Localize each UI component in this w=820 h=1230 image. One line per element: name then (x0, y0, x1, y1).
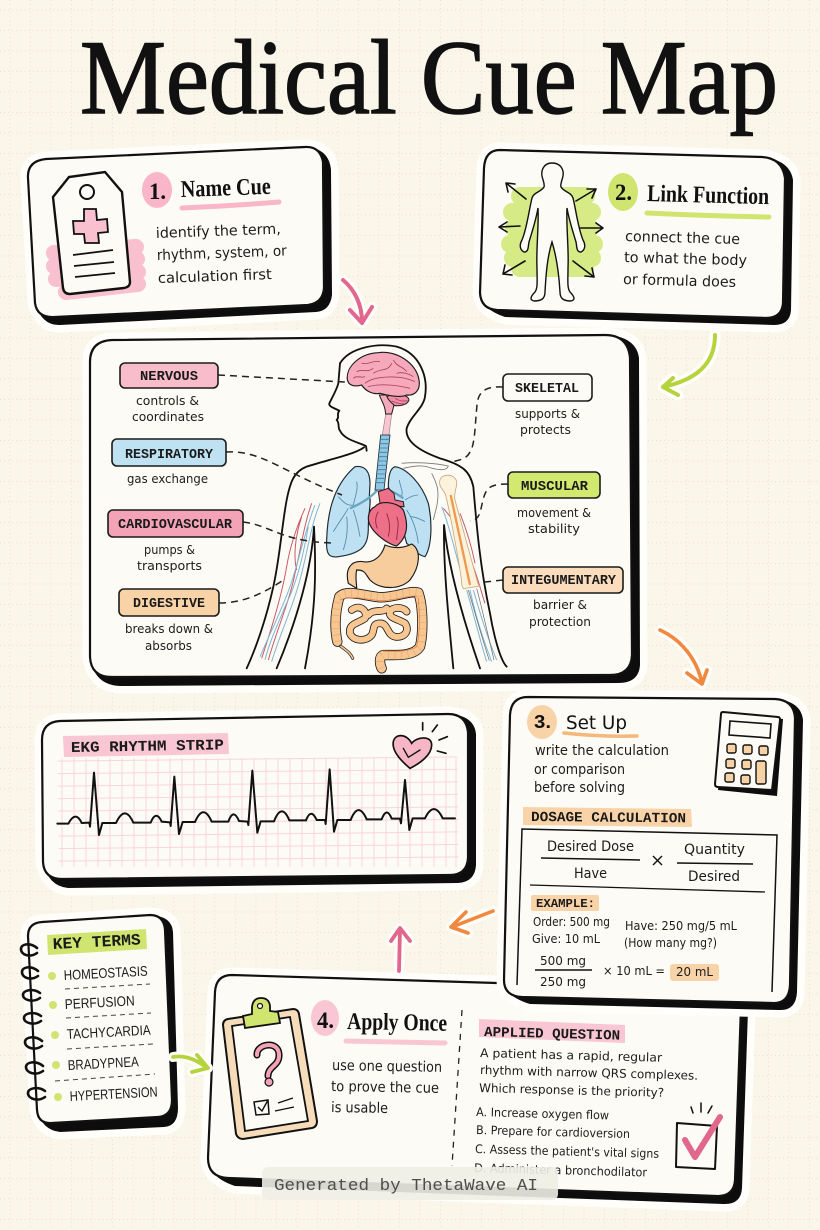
term list (48, 963, 158, 1104)
example values (532, 915, 737, 950)
answer options: A. Increase oxygen flow (476, 1105, 609, 1122)
label: digestive: DIGESTIVE (133, 597, 205, 612)
label: cardiovascular: pumps & (144, 543, 195, 557)
heading: apply once (346, 1009, 448, 1043)
panel: 3 set up (504, 697, 803, 1010)
text block (331, 1058, 442, 1117)
body outline (247, 345, 507, 668)
heading: name cue: Name Cue (180, 174, 271, 203)
trachea (375, 414, 392, 490)
label: skeletal: protects (520, 423, 571, 437)
step number 1: 1. (149, 179, 166, 204)
example calculation: 20 mL (676, 965, 713, 979)
watermark (262, 1167, 558, 1200)
label: integumentary: INTEGUMENTARY (511, 574, 617, 589)
term list: HYPERTENSION (69, 1083, 158, 1104)
step number 3 (527, 705, 557, 739)
label: muscular: MUSCULAR (521, 480, 589, 495)
label: respiratory: RESPIRATORY (125, 448, 214, 463)
stomach (347, 544, 418, 588)
label: respiratory: gas exchange (127, 472, 208, 486)
term list: PERFUSION (64, 992, 135, 1012)
example calculation (535, 954, 719, 989)
text block: before solving (534, 780, 625, 796)
label: skeletal: supports & (515, 407, 580, 421)
text block: write the calculation (535, 743, 669, 759)
text block: to what the body (624, 250, 748, 269)
formula: Quantity (684, 842, 745, 858)
question text (479, 1046, 698, 1100)
label: digestive (119, 589, 219, 653)
icon: calculator (715, 712, 783, 796)
label: key terms: KEY TERMS (52, 931, 142, 954)
heading: apply once: Apply Once (347, 1009, 448, 1037)
answer options: D. Administer a bronchodilator (474, 1161, 647, 1180)
text block: identify the term, (156, 222, 281, 242)
text block (623, 229, 748, 291)
icon: medical tag (53, 172, 138, 294)
formula: Desired (688, 869, 740, 885)
question text: Which response is the priority? (479, 1081, 664, 1100)
label: digestive: breaks down & (125, 622, 213, 636)
answer options: C. Assess the patient's vital signs (475, 1142, 659, 1161)
panel: key terms (21, 915, 178, 1132)
text block: or formula does (623, 272, 736, 291)
label: dosage calculation: DOSAGE CALCULATION (531, 810, 686, 827)
watermark: Generated by ThetaWave AI (274, 1176, 538, 1195)
anatomy illustration (247, 345, 507, 668)
icon: heart (393, 723, 447, 768)
formula box (517, 829, 777, 992)
text block: connect the cue (625, 229, 740, 248)
label: respiratory (112, 439, 226, 486)
text block: calculation first (158, 267, 272, 287)
formula: Have (574, 866, 607, 882)
step number 4: 4. (317, 1008, 334, 1033)
heading: link function: Link Function (647, 181, 769, 210)
label: muscular: movement & (517, 506, 591, 520)
label: cardiovascular (108, 510, 243, 573)
label: example: EXAMPLE: (536, 897, 595, 911)
label: digestive: absorbs (145, 639, 192, 653)
arrow: lime curve (663, 335, 715, 395)
label: applied question: APPLIED QUESTION (484, 1025, 620, 1045)
panel: 1 name cue (28, 147, 332, 325)
leader lines (218, 375, 508, 603)
heading: set up: Set Up (566, 712, 627, 734)
label: ekg rhythm strip: EKG RHYTHM STRIP (71, 737, 224, 757)
text block (534, 743, 669, 796)
label: nervous (120, 363, 218, 424)
term list: TACHYCARDIA (66, 1022, 152, 1042)
label: nervous: coordinates (132, 410, 204, 424)
question text: A patient has a rapid, regular (480, 1046, 662, 1065)
step number 1 (142, 172, 172, 208)
text block: rhythm, system, or (157, 243, 287, 264)
step number 3: 3. (534, 712, 551, 732)
term list: BRADYPNEA (67, 1053, 140, 1073)
lungs (327, 466, 431, 557)
label: muscular (508, 472, 600, 536)
step number 2: 2. (615, 180, 632, 205)
icon: clipboard (223, 998, 317, 1139)
example calculation: × 10 mL = (603, 964, 665, 978)
arrow: lime right (173, 1055, 208, 1072)
example values: Give: 10 mL (532, 932, 600, 946)
answer options (474, 1105, 659, 1180)
formula: Desired Dose (547, 839, 634, 855)
text block: is usable (331, 1100, 388, 1117)
spiral binding (21, 944, 45, 1100)
step number 2 (608, 173, 638, 211)
step number 4 (311, 1000, 339, 1036)
label: nervous: controls & (136, 394, 199, 408)
label: cardiovascular: CARDIOVASCULAR (118, 518, 233, 533)
example calculation: 500 mg (540, 954, 586, 968)
term list: HOMEOSTASIS (63, 963, 148, 983)
ekg trace (57, 769, 455, 835)
arrow: pink up (391, 928, 410, 971)
panel: ekg strip (42, 714, 476, 888)
label: integumentary: barrier & (533, 598, 587, 612)
label: integumentary (503, 567, 623, 629)
label: skeletal: SKELETAL (515, 382, 579, 397)
bone (440, 475, 480, 589)
intestines (335, 592, 422, 668)
label: nervous: NERVOUS (140, 370, 198, 385)
ekg grid (57, 757, 459, 867)
text block: to prove the cue (331, 1079, 439, 1097)
arm vessels (260, 503, 497, 662)
text block: use one question (332, 1058, 442, 1076)
example calculation: 250 mg (540, 975, 586, 989)
text block (156, 222, 287, 287)
arrow: pink curve (343, 280, 372, 323)
label: skeletal (503, 374, 592, 437)
label: integumentary: protection (529, 615, 591, 629)
panel: body systems (90, 335, 640, 686)
formula (530, 839, 765, 892)
text block: or comparison (534, 762, 625, 778)
example values: Order: 500 mg (533, 915, 610, 929)
answer options: B. Prepare for cardioversion (476, 1123, 630, 1141)
label: cardiovascular: transports (137, 559, 202, 573)
panel: 2 link function (480, 150, 793, 325)
panel: 4 apply once (208, 975, 748, 1204)
brain (347, 352, 419, 414)
question text: rhythm with narrow QRS complexes. (480, 1063, 698, 1083)
label: muscular: stability (528, 522, 580, 536)
heart (368, 488, 407, 546)
arrow: orange curve (660, 630, 707, 684)
example values: (How many mg?) (624, 936, 717, 950)
icon: body with arrows (499, 163, 603, 301)
arrow: orange left (451, 911, 493, 933)
icon: checkbox (676, 1103, 720, 1169)
example values: Have: 250 mg/5 mL (625, 919, 737, 933)
